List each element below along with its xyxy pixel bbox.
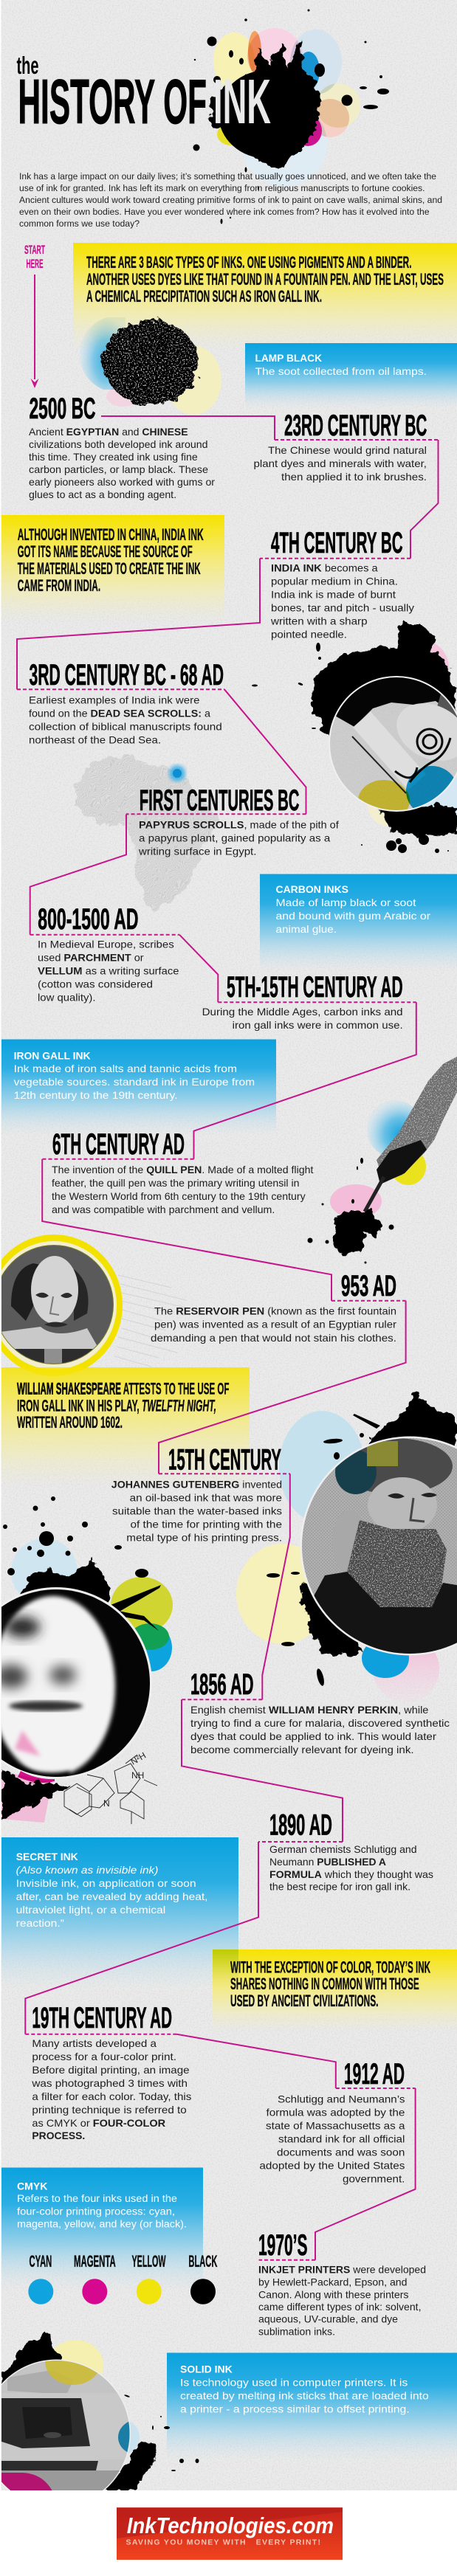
event: 1890 ad [269, 1809, 433, 1892]
info box: secret ink: (Also known as invisible ink) [16, 1864, 158, 1876]
event: 19th century ad: printing technique is referred to [32, 2104, 187, 2116]
event: 1970s [258, 2229, 426, 2338]
callout box: india ink name: GOT ITS NAME BECAUSE THE SOURCE OF [18, 542, 193, 561]
event: 23rd century bc [254, 410, 427, 483]
chemical structure diagram: NH [131, 1770, 144, 1781]
event: 1912 ad: state of Massachusetts as a [266, 2119, 405, 2131]
event: 2500 BC [29, 393, 215, 500]
info box: carbon inks: and bound with gum Arabic or [276, 910, 430, 922]
cmyk swatches: CYAN [30, 2252, 52, 2271]
event: 4th century bc: bones, tar and pitch - usually [271, 601, 414, 613]
event: 6th century ad: 6TH CENTURY AD [52, 1128, 185, 1161]
event: 3rd century bc to 68 ad: northeast of the Dead Sea. [29, 733, 161, 745]
event: 23rd century bc: then applied it to ink brushes. [281, 471, 427, 483]
chemical structure diagram: N [103, 1798, 110, 1809]
callout box: shakespeare: WILLIAM SHAKESPEARE ATTESTS TO THE USE OF [17, 1380, 229, 1398]
event: 23rd century bc: plant dyes and minerals with water, [254, 457, 427, 469]
info box: carbon inks: Made of lamp black or soot [276, 897, 416, 908]
event: first centuries bc: a papyrus plant, gained popularity as a [139, 832, 331, 844]
info box: iron gall ink: vegetable sources. standard ink in Europe from [14, 1076, 255, 1088]
info box: carbon inks [260, 874, 457, 971]
event: 1912 ad: adopted by the United States [259, 2159, 405, 2171]
event: 4th century bc: India ink is made of burnt [271, 588, 396, 600]
event: 19th century ad: as CMYK or FOUR-COLOR [32, 2117, 165, 2129]
event: 2500 BC: glues to act as a bonding agent. [29, 488, 176, 500]
event: 1912 ad: documents and was soon [277, 2146, 405, 2158]
image: printer with splat [0, 2330, 199, 2507]
event: 3rd century bc to 68 ad: 3RD CENTURY BC - 68 AD [30, 659, 224, 691]
intro paragraph [19, 171, 442, 229]
event: 1970s: by Hewlett-Packard, Epson, and [258, 2276, 408, 2287]
event: 4th century bc [270, 527, 414, 640]
event: 1912 ad: Schlutigg and Neumann’s [278, 2093, 405, 2104]
event: 6th century ad [52, 1128, 314, 1215]
event: 1890 ad: German chemists Schlutigg and [269, 1843, 417, 1855]
title: the [16, 52, 38, 79]
event: 3rd century bc to 68 ad: collection of biblical manuscripts found [29, 720, 222, 732]
event: 15th century [111, 1443, 282, 1544]
event: 2500 BC: civilizations both developed ink around [29, 438, 208, 450]
info box: secret ink: ultraviolet light, or a chemical [16, 1904, 165, 1916]
image: portrait of perkin with splat [0, 1496, 173, 1823]
event: 1912 ad: standard ink for all official [278, 2133, 405, 2144]
intro paragraph: common forms we use today? [19, 218, 140, 229]
ink splat: title [193, 9, 389, 224]
callout box: shakespeare [1, 1367, 250, 1487]
cmyk swatches: BLACK [188, 2252, 217, 2271]
event: 1970s: 1970’S [258, 2229, 307, 2262]
info box: cmyk: Refers to the four inks used in the [17, 2193, 177, 2204]
event: 953 ad [151, 1270, 396, 1344]
event: 5th-15th century ad [202, 971, 403, 1031]
event: 23rd century bc: The Chinese would grind natural [268, 444, 427, 456]
event: 1890 ad: FORMULA which they thought was [269, 1868, 433, 1880]
info box: carbon inks: CARBON INKS [276, 883, 348, 895]
callout box: india ink name: THE MATERIALS USED TO CREATE THE INK [18, 559, 201, 578]
event: 6th century ad: the Western World from 6th century to the 19th century [52, 1190, 306, 1202]
event: 800-1500 ad: used PARCHMENT or [38, 952, 144, 964]
callout box: three types of inks [73, 243, 457, 350]
event: 15th century: of the time for printing with the [130, 1519, 282, 1530]
event: 953 ad: The RESERVOIR PEN (known as the first fountain [154, 1305, 396, 1317]
logo: inktechnologies.com: InkTechnologies.com [127, 2513, 334, 2538]
event: 2500 BC: carbon particles, or lamp black. These [29, 463, 208, 475]
event: 19th century ad: PROCESS. [32, 2130, 85, 2141]
event: 2500 BC: early pioneers also worked with gums or [29, 476, 215, 488]
event: 1912 ad: government. [343, 2172, 405, 2184]
event: first centuries bc [138, 784, 339, 857]
event: 6th century ad: and was compatible with parchment and vellum. [52, 1204, 275, 1215]
event: 1970s: sublimation inks. [258, 2326, 335, 2338]
info box: lamp black [245, 343, 457, 408]
cmyk swatches: MAGENTA [74, 2252, 116, 2271]
title: INK [213, 67, 271, 137]
event: 19th century ad: was photographed 3 times with [31, 2077, 188, 2089]
info box: secret ink [1, 1837, 238, 1989]
info box: carbon inks: animal glue. [276, 923, 337, 935]
start here marker: HERE [27, 257, 43, 271]
event: first centuries bc: writing surface in Egypt. [138, 846, 256, 857]
event: 19th century ad: a filter for each color. Today, this [32, 2090, 191, 2102]
event: 800-1500 ad [38, 903, 179, 1004]
info box: iron gall ink: IRON GALL INK [14, 1049, 91, 1061]
event: 800-1500 ad: (cotton was considered [38, 978, 153, 990]
info box: secret ink: after, can be revealed by adding heat, [16, 1890, 207, 1902]
event: 19th century ad: Before digital printing, an image [32, 2064, 190, 2076]
chemical structure diagram [64, 1750, 157, 1824]
event: first centuries bc: PAPYRUS SCROLLS , made of the pith of [139, 819, 339, 831]
intro paragraph: Ink has a large impact on our daily lives; it’s something that usually goes unnoticed, and we often take the [19, 171, 436, 182]
event: 1890 ad: the best recipe for iron gall ink. [269, 1880, 410, 1892]
info box: solid ink: a printer - a process similar to offset printing. [180, 2403, 410, 2414]
event: 5th-15th century ad: iron gall inks were in common use. [233, 1019, 403, 1031]
event: 1890 ad: 1890 AD [269, 1809, 332, 1842]
event: 1912 ad: formula was adopted by the [266, 2106, 405, 2118]
image: portrait of gutenberg with splat [236, 1391, 457, 1702]
event: 1856 ad: trying to find a cure for malaria, discovered synthetic [190, 1717, 450, 1729]
info box: solid ink: SOLID INK [180, 2363, 233, 2375]
logo: inktechnologies.com [117, 2507, 343, 2560]
image: dead sea scroll with splat [252, 624, 457, 853]
info box: lamp black: LAMP BLACK [255, 352, 322, 364]
event: 1912 ad: 1912 AD [344, 2058, 405, 2090]
callout box: india ink name: ALTHOUGH INVENTED IN CHINA, INDIA INK [18, 525, 204, 544]
start here marker: START [24, 243, 45, 257]
event: 800-1500 ad: VELLUM as a writing surface [38, 965, 179, 977]
info box: cmyk: magenta, yellow, and key (or black). [17, 2218, 187, 2230]
callout box: shakespeare: WRITTEN AROUND 1602. [17, 1413, 123, 1432]
event: 4th century bc: pointed needle. [271, 628, 347, 640]
title [16, 56, 270, 124]
event: 5th-15th century ad: During the Middle Ages, carbon inks and [202, 1006, 403, 1018]
logo: inktechnologies.com: SAVING YOU MONEY WITH EVERY PRINT! [126, 2538, 320, 2547]
event: 1856 ad: 1856 AD [190, 1668, 254, 1701]
event: 1856 ad [190, 1668, 450, 1755]
info box: lamp black: The soot collected from oil lamps. [255, 365, 427, 377]
info box: solid ink: created by melting ink sticks that are loaded into [180, 2389, 429, 2401]
event: 3rd century bc to 68 ad: Earliest examples of India ink were [29, 694, 200, 705]
event: 800-1500 ad: low quality). [38, 992, 96, 1004]
info box: cmyk [1, 2168, 217, 2304]
event: first centuries bc: FIRST CENTURIES BC [140, 784, 300, 817]
event: 15th century: JOHANNES GUTENBERG invented [111, 1479, 282, 1491]
callout box: india ink name: CAME FROM INDIA. [18, 576, 100, 595]
callout box: today's ink [213, 1950, 457, 2032]
intro paragraph: Ancient cultures would work toward creating primitive forms of ink to paint on cave walls, animal skins, and [19, 195, 442, 205]
event: 1856 ad: become commercially relevant for dyeing ink. [190, 1744, 414, 1755]
event: 6th century ad: feather, the quill pen was the primary writing utensil in [52, 1177, 300, 1189]
event: 1970s: aqueous, UV-curable, and dye [258, 2313, 398, 2325]
info box: iron gall ink: 12th century to the 19th century. [14, 1089, 178, 1101]
intro paragraph: use of ink for granted. Ink has left its mark on everything from religious manuscripts to fortune cookies. [19, 183, 425, 193]
title: HISTORY OF [18, 67, 207, 137]
info box: iron gall ink [1, 1039, 276, 1135]
chemical structure diagram: N²H [128, 1750, 148, 1767]
event: 1856 ad: English chemist WILLIAM HENRY PERKIN , while [190, 1704, 429, 1716]
event: 1856 ad: dyes that could be applied to ink. This would later [190, 1730, 436, 1742]
event: 953 ad: demanding a pen that would not stain his clothes. [151, 1332, 396, 1344]
event: 1912 ad [259, 2058, 405, 2184]
info box: secret ink: Invisible ink, on application or soon [16, 1877, 196, 1889]
image: quill pen with splat [307, 1057, 457, 1263]
event: 19th century ad [31, 2002, 191, 2141]
event: 953 ad: pen) was invented as a result of an Egyptian ruler [154, 1319, 396, 1330]
event: 953 ad: 953 AD [341, 1270, 396, 1302]
info box: cmyk: CMYK [17, 2180, 47, 2192]
event: 800-1500 ad: 800-1500 AD [38, 903, 138, 936]
event: 15th century: suitable than the water-based inks [112, 1505, 282, 1517]
event: 4th century bc: written with a sharp [270, 615, 368, 626]
event: 1970s: INKJET PRINTERS were developed [258, 2264, 426, 2276]
start here marker [24, 243, 45, 388]
event: 19th century ad: process for a four-color print. [32, 2051, 176, 2062]
callout box: shakespeare: IRON GALL INK IN HIS PLAY, TWELFTH NIGHT, [17, 1396, 216, 1415]
info box: solid ink [167, 2352, 457, 2460]
cmyk swatches: YELLOW [131, 2252, 166, 2271]
event: 2500 BC: Ancient EGYPTIAN and CHINESE [29, 426, 188, 438]
info box: solid ink: Is technology used in computer printers. It is [180, 2376, 408, 2388]
map: africa [75, 756, 221, 911]
callout box: india ink name [1, 515, 224, 622]
event: 15th century: an oil-based ink that was more [130, 1492, 282, 1504]
event: 800-1500 ad: In Medieval Europe, scribes [38, 939, 174, 950]
info box: secret ink: reaction.” [16, 1917, 64, 1929]
info box: cmyk: four-color printing process: cyan, [17, 2206, 175, 2217]
event: 2500 BC: 2500 BC [30, 393, 96, 425]
event: 3rd century bc to 68 ad: found on the DEAD SEA SCROLLS: a [29, 707, 210, 719]
event: 1970s: came different types of ink: solvent, [258, 2301, 421, 2313]
info box: secret ink: SECRET INK [16, 1851, 78, 1862]
image: portrait of shakespeare [0, 1235, 189, 1376]
event: 19th century ad: Many artists developed a [32, 2037, 157, 2049]
info box: iron gall ink: Ink made of iron salts and tannic acids from [14, 1063, 237, 1074]
event: 3rd century bc to 68 ad [29, 659, 224, 745]
event: 1890 ad: Neumann PUBLISHED A [269, 1856, 386, 1868]
event: 2500 BC: this time. They created ink using fine [29, 451, 198, 463]
timeline path [17, 416, 439, 2260]
event: 4th century bc: popular medium in China. [271, 575, 398, 587]
cmyk swatches [28, 2252, 217, 2304]
event: 1970s: Canon. Along with these printers [258, 2289, 409, 2301]
icon: lamp black pile [80, 317, 221, 415]
event: 15th century: metal type of his printing press. [126, 1532, 282, 1544]
event: 19th century ad: 19TH CENTURY AD [32, 2002, 172, 2034]
intro paragraph: even on their own bodies. Have you ever wondered where ink comes from? How has it evolved into the [19, 207, 430, 217]
event: 15th century: 15TH CENTURY [168, 1443, 281, 1476]
event: 4th century bc: INDIA INK becomes a [271, 562, 378, 573]
event: 6th century ad: The invention of the QUILL PEN. Made of a molted flight [52, 1164, 314, 1175]
